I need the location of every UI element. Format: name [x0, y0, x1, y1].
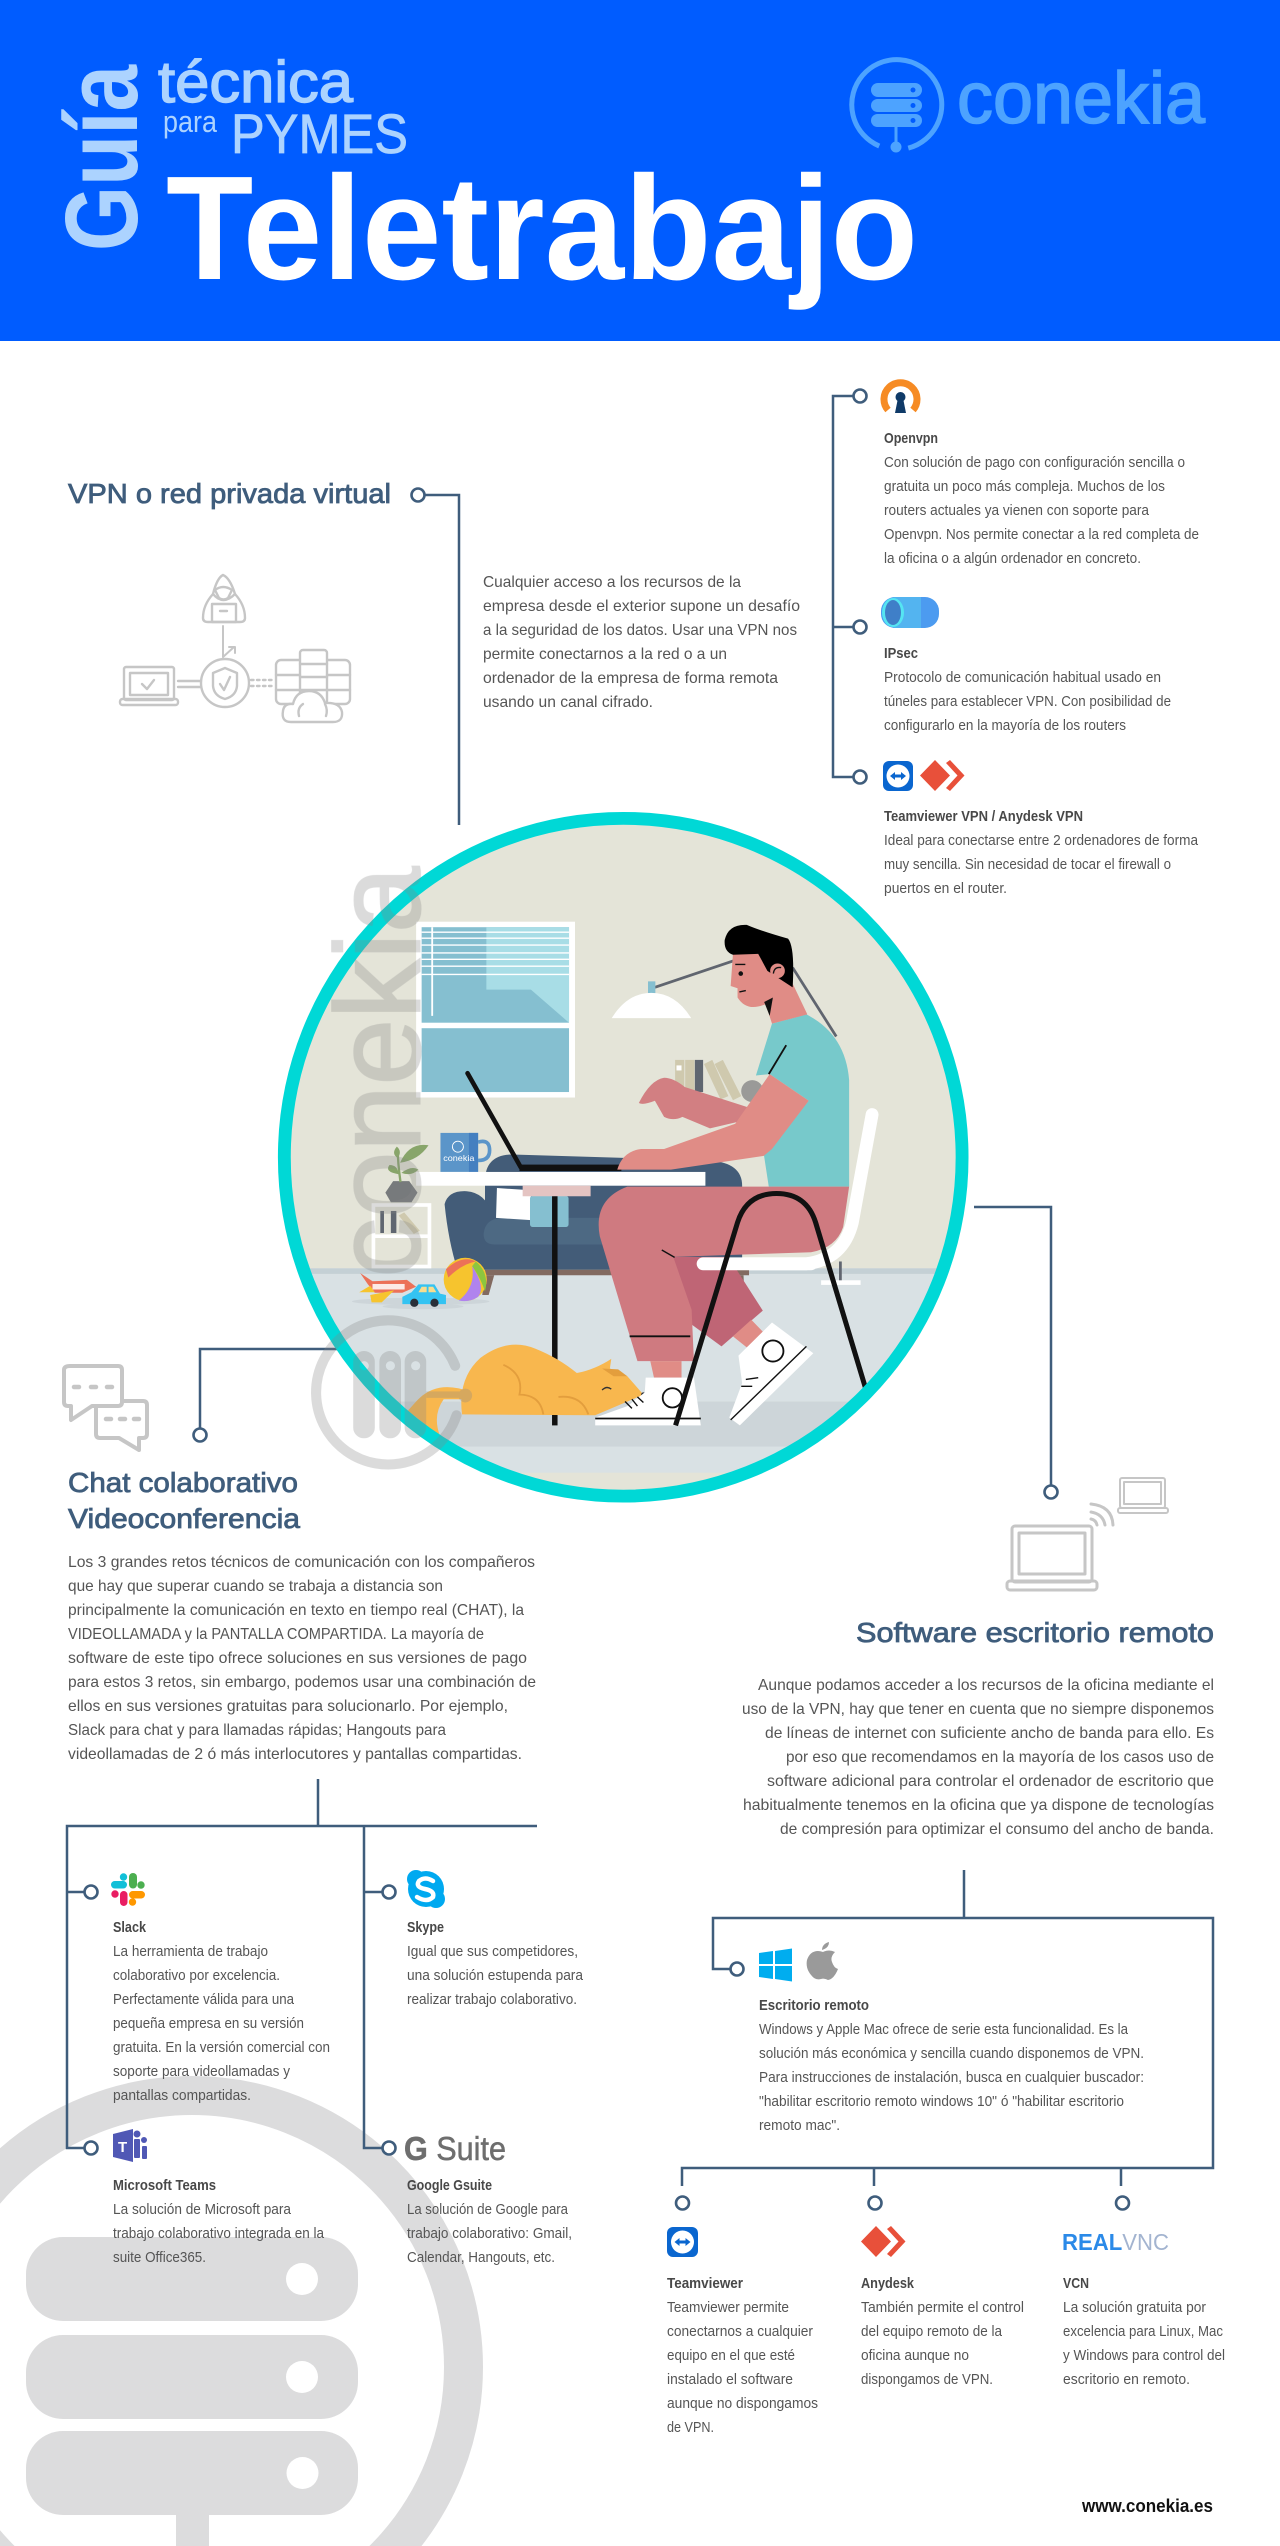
item: Microsoft Teams: trabajo colaborativo integrada en la — [113, 2225, 325, 2242]
item: Google Gsuite — [407, 2177, 572, 2266]
item: Openvpn: Openvpn. Nos permite conectar a la red completa de — [884, 526, 1199, 543]
icon: IPsec tunnel — [881, 597, 939, 628]
connector: VPN heading to illustration — [412, 488, 459, 825]
connector: VPN options — [833, 390, 866, 784]
central illustration: person working at home — [278, 809, 972, 1507]
icon: Apple — [807, 1942, 838, 1980]
item: Escritorio remoto: remoto mac". — [759, 2117, 840, 2134]
item: Slack: pequeña empresa en su versión — [113, 2015, 304, 2032]
icon: Microsoft Teams: T — [118, 2139, 127, 2156]
text: remote desktop intro: habitualmente tenemos en la oficina que ya dispone de tecnologías — [743, 1797, 1214, 1814]
item: Skype — [407, 1919, 584, 2008]
connector: scene to remote desktop — [974, 1207, 1051, 1485]
panel: VPN — [68, 478, 800, 825]
item: VCN: escritorio en remoto. — [1063, 2371, 1190, 2388]
laptop — [120, 667, 178, 705]
item: VCN — [1063, 2275, 1225, 2388]
item: Slack: La herramienta de trabajo — [113, 1943, 268, 1960]
text: chat intro: para estos 3 retos, sin embargo, podemos usar una combinación de — [68, 1674, 536, 1691]
title: Teletrabajo: Teletrabajo — [166, 146, 918, 311]
connector tree: chat tools — [67, 1779, 537, 2154]
item: Anydesk: oficina aunque no — [861, 2347, 969, 2364]
item: Slack: gratuita. En la versión comercial con — [113, 2039, 330, 2056]
item: Anydesk: También permite el control — [861, 2299, 1024, 2316]
text: remote desktop intro: software adicional para controlar el ordenador de escritorio que — [767, 1773, 1214, 1790]
item: Microsoft Teams: suite Office365. — [113, 2249, 206, 2266]
item: Anydesk — [861, 2275, 1024, 2388]
text: VPN intro: ordenador de la empresa de forma remota — [483, 670, 778, 687]
footer: website: www.conekia.es — [1081, 2496, 1213, 2516]
text: remote desktop intro — [742, 1677, 1214, 1838]
icon: TeamViewer — [667, 2227, 698, 2257]
item: Slack: pantallas compartidas. — [113, 2087, 251, 2104]
icon: AnyDesk — [861, 2226, 906, 2257]
chair seat and legs — [676, 1194, 866, 1425]
icon: TeamViewer — [883, 761, 913, 791]
item: Slack: colaborativo por excelencia. — [113, 1967, 280, 1984]
connector tree: remote tools — [676, 1870, 1213, 2210]
logo: conekia — [846, 54, 1205, 154]
item: Teamviewer: de VPN. — [667, 2419, 714, 2436]
icon: Skype — [407, 1870, 445, 1908]
item: Teamviewer VPN / Anydesk VPN: Teamviewer VPN / Anydesk VPN — [884, 808, 1083, 825]
background watermark: server logo — [0, 2096, 464, 2546]
icon: Microsoft Teams — [113, 2129, 147, 2162]
text: VPN intro: permite conectarnos a la red o a un — [483, 646, 727, 663]
heading: chat: Chat colaborativo — [68, 1467, 298, 1498]
connector: scene to chat — [200, 1349, 345, 1429]
panel: chat and videoconference — [64, 1366, 584, 2266]
item: Skype: Skype — [407, 1919, 444, 1936]
neck and head — [765, 984, 807, 1024]
item: Google Gsuite: Calendar, Hangouts, etc. — [407, 2249, 555, 2266]
item: IPsec: IPsec — [884, 645, 918, 662]
item: Slack: Slack — [113, 1919, 147, 1936]
item: Teamviewer VPN / Anydesk VPN: puertos en el router. — [884, 880, 1007, 897]
window — [416, 922, 575, 1098]
item: Teamviewer: instalado el software — [667, 2371, 793, 2388]
text: VPN intro — [483, 574, 800, 711]
far arm — [639, 1078, 749, 1128]
heading: para: para — [163, 104, 218, 139]
heading: técnica: técnica — [158, 50, 354, 115]
plant — [385, 1145, 429, 1202]
item: Teamviewer — [667, 2275, 818, 2436]
icon: laptops with wifi — [1007, 1478, 1168, 1590]
chair back — [749, 1108, 878, 1270]
cat — [408, 1345, 646, 1436]
item: Google Gsuite: La solución de Google para — [407, 2201, 569, 2218]
icon: AnyDesk — [920, 760, 964, 791]
laptop — [468, 1073, 621, 1171]
text: VPN intro: Cualquier acceso a los recursos de la — [483, 574, 741, 591]
heading: VPN: VPN o red privada virtual — [68, 478, 391, 509]
text: chat intro: ellos en sus versiones gratuitas para solucionarlo. Por ejemplo, — [68, 1698, 508, 1715]
text: remote desktop intro: uso de la VPN, hay que tener en cuenta que no siempre disponemos — [742, 1701, 1214, 1718]
item: Microsoft Teams — [113, 2177, 325, 2266]
text: chat intro: software de este tipo ofrece soluciones en sus versiones de pago — [68, 1650, 527, 1667]
sofa — [445, 1154, 749, 1295]
mug — [440, 1133, 490, 1172]
item: Skype: Igual que sus competidores, — [407, 1943, 578, 1960]
item: Teamviewer: Teamviewer — [667, 2275, 743, 2292]
lamp — [612, 961, 836, 1036]
arrow — [223, 626, 235, 657]
item: Teamviewer: aunque no dispongamos — [667, 2395, 818, 2412]
text: chat intro: Slack para chat y para llamadas rápidas; Hangouts para — [68, 1722, 446, 1739]
item: VCN: y Windows para control del — [1063, 2347, 1225, 2364]
text: remote desktop intro: de compresión para optimizar el consumo del ancho de banda. — [780, 1821, 1214, 1838]
heading: PYMES: PYMES — [231, 102, 408, 165]
icon: chat bubbles — [64, 1366, 147, 1450]
item: Google Gsuite: Google Gsuite — [407, 2177, 492, 2194]
item: Escritorio remoto: "habilitar escritorio remoto windows 10" ó "habilitar escritorio — [759, 2093, 1124, 2110]
item: IPsec — [884, 645, 1171, 734]
icon: Slack — [111, 1873, 145, 1906]
heading: Guía: Guía — [44, 64, 159, 251]
item: Escritorio remoto: Para instrucciones de instalación, busca en cualquier buscador: — [759, 2069, 1144, 2086]
item: Microsoft Teams: La solución de Microsoft para — [113, 2201, 292, 2218]
watermark: conekia logo — [312, 866, 472, 1464]
books — [675, 1060, 763, 1102]
hacker — [203, 575, 245, 622]
header banner — [0, 0, 1280, 341]
item: Openvpn: Openvpn — [884, 430, 938, 447]
icon: VPN diagram — [120, 575, 350, 722]
text: remote desktop intro: Aunque podamos acceder a los recursos de la oficina mediante el — [758, 1677, 1214, 1694]
icon: G Suite: G Suite — [404, 2130, 506, 2167]
text: chat intro: VIDEOLLAMADA y la PANTALLA COMPARTIDA. La mayoría de — [68, 1626, 484, 1643]
floor — [278, 1268, 972, 1473]
mug: conekia — [443, 1154, 475, 1163]
shirt — [756, 1014, 849, 1187]
item: Escritorio remoto: Escritorio remoto — [759, 1997, 869, 2014]
item: IPsec: túneles para establecer VPN. Con posibilidad de — [884, 693, 1171, 710]
item: Skype: realizar trabajo colaborativo. — [407, 1991, 577, 2008]
item: Escritorio remoto: Windows y Apple Mac ofrece de serie esta funcionalidad. Es la — [759, 2021, 1129, 2038]
wall — [278, 809, 972, 1507]
shoes — [595, 1378, 701, 1425]
item: Escritorio remoto — [759, 1997, 1144, 2134]
text: remote desktop intro: de líneas de internet con suficiente ancho de banda para ello. Es — [765, 1725, 1214, 1742]
item: Anydesk: del equipo remoto de la — [861, 2323, 1003, 2340]
item: Teamviewer: conectarnos a cualquier — [667, 2323, 813, 2340]
back leg — [671, 1257, 763, 1346]
item: Teamviewer: equipo en el que esté — [667, 2347, 795, 2364]
item: Skype: una solución estupenda para — [407, 1967, 584, 1984]
text: chat intro: principalmente la comunicación en texto en tiempo real (CHAT), la — [68, 1602, 524, 1619]
item: Openvpn: routers actuales ya vienen con soporte para — [884, 502, 1150, 519]
heading: chat: Videoconferencia — [68, 1503, 300, 1534]
text: chat intro: Los 3 grandes retos técnicos de comunicación con los compañeros — [68, 1554, 535, 1571]
heading: chat — [68, 1467, 300, 1534]
item: VCN: excelencia para Linux, Mac — [1063, 2323, 1223, 2340]
item: Microsoft Teams: Microsoft Teams — [113, 2177, 216, 2194]
icon: RealVNC: REALVNC — [1062, 2229, 1169, 2255]
text: VPN intro: a la seguridad de los datos. Usar una VPN nos — [483, 622, 797, 639]
shelf — [373, 1205, 429, 1267]
item: Escritorio remoto: solución más económica y sencilla cuando disponemos de VPN. — [759, 2045, 1144, 2062]
logo: conekia: conekia — [957, 58, 1205, 139]
heading: remote desktop: Software escritorio remoto — [856, 1617, 1214, 1648]
item: Openvpn — [884, 430, 1199, 567]
item: Teamviewer VPN / Anydesk VPN: muy sencilla. Sin necesidad de tocar el firewall o — [884, 856, 1171, 873]
item: VCN: La solución gratuita por — [1063, 2299, 1206, 2316]
text: remote desktop intro: por eso que recomendamos en la mayoría de los casos uso de — [786, 1749, 1214, 1766]
item: Openvpn: la oficina o a algún ordenador en concreto. — [884, 550, 1141, 567]
item: Teamviewer VPN / Anydesk VPN — [884, 808, 1199, 897]
text: VPN intro: empresa desde el exterior supone un desafío — [483, 598, 800, 615]
ring — [284, 818, 962, 1496]
icon: Windows — [759, 1948, 792, 1982]
text: chat intro: videollamadas de 2 ó más interlocutores y pantallas compartidas. — [68, 1746, 522, 1763]
person — [595, 925, 849, 1425]
item: Anydesk: dispongamos de VPN. — [861, 2371, 993, 2388]
toys — [352, 1258, 490, 1309]
item: Openvpn: Con solución de pago con configuración sencilla o — [884, 454, 1185, 471]
text: chat intro: que hay que superar cuando se trabaja a distancia son — [68, 1578, 443, 1595]
item: Anydesk: Anydesk — [861, 2275, 915, 2292]
panel: VPN options — [833, 383, 1199, 897]
item: VCN: VCN — [1063, 2275, 1089, 2292]
watermark: conekia logo: conekia — [312, 866, 446, 1278]
item: Slack — [113, 1919, 330, 2104]
item: IPsec: configurarlo en la mayoría de los routers — [884, 717, 1126, 734]
item: Teamviewer: Teamviewer permite — [667, 2299, 789, 2316]
table — [416, 1172, 705, 1425]
item: Google Gsuite: trabajo colaborativo: Gmail, — [407, 2225, 572, 2242]
item: Slack: Perfectamente válida para una — [113, 1991, 295, 2008]
panel: remote desktop software — [667, 1478, 1225, 2436]
front leg — [599, 1187, 849, 1361]
item: Slack: soporte para videollamadas y — [113, 2063, 290, 2080]
item: IPsec: Protocolo de comunicación habitual usado en — [884, 669, 1161, 686]
item: Openvpn: gratuita un poco más compleja. Muchos de los — [884, 478, 1165, 495]
icon: OpenVPN — [884, 383, 917, 413]
text: chat intro — [68, 1554, 536, 1763]
item: Teamviewer VPN / Anydesk VPN: Ideal para conectarse entre 2 ordenadores de forma — [884, 832, 1199, 849]
near arm — [617, 1074, 809, 1170]
shield — [178, 659, 274, 707]
text: VPN intro: usando un canal cifrado. — [483, 694, 653, 711]
servers and cloud — [276, 650, 350, 722]
